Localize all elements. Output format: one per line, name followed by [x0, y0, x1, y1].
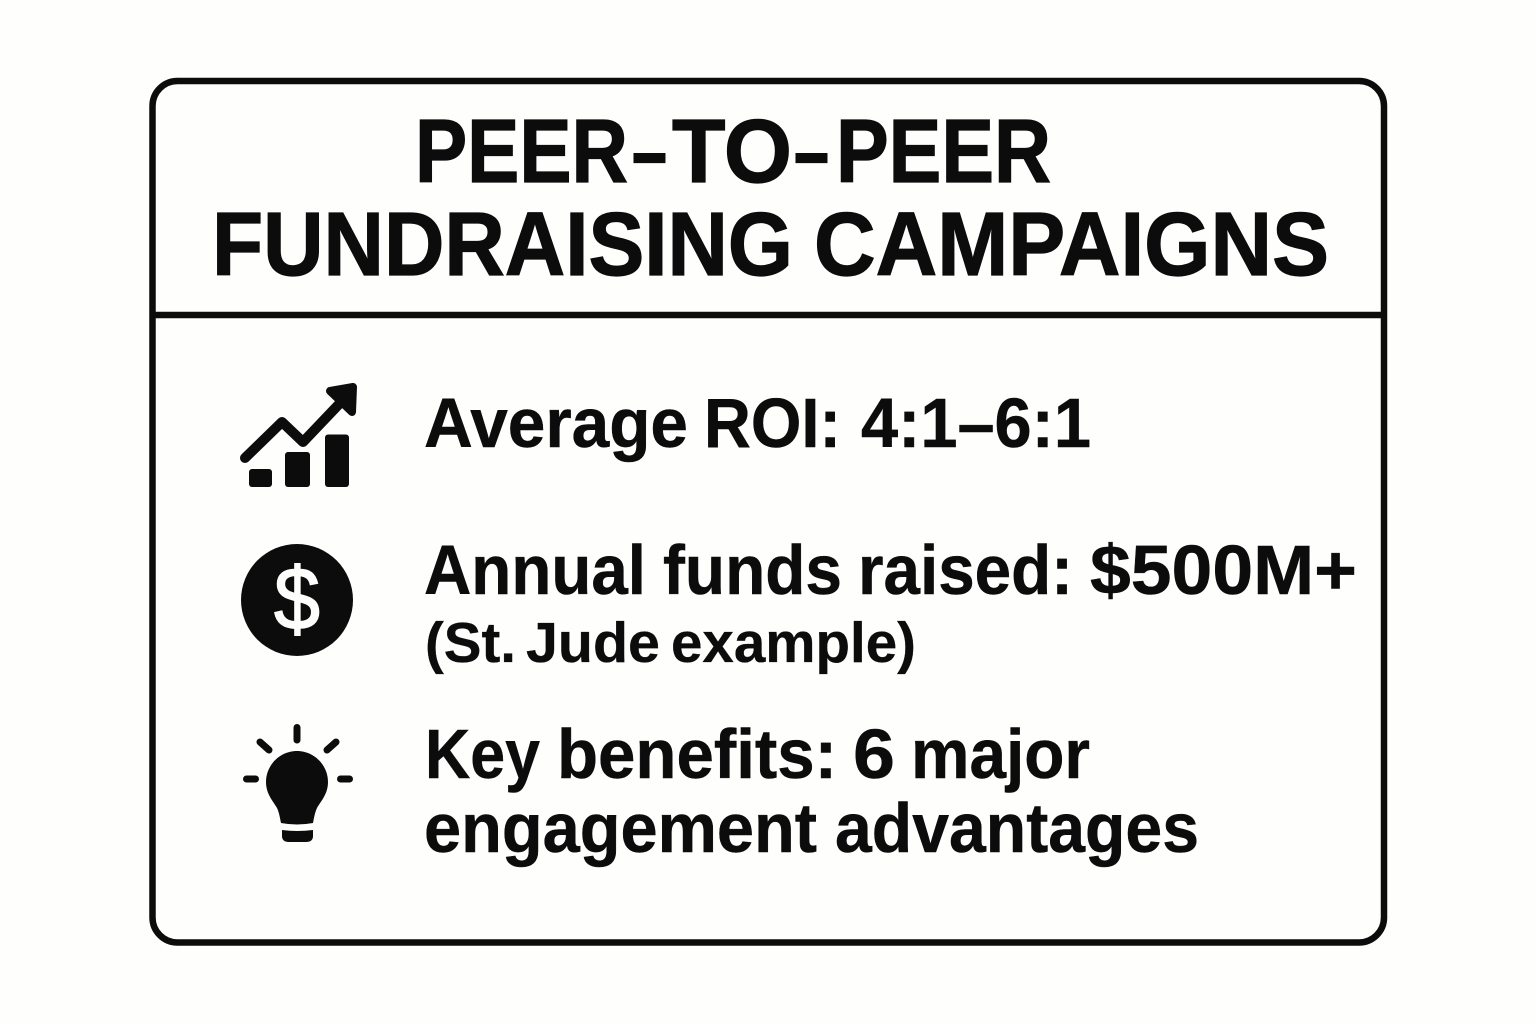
icon: dollar coin: $: [274, 549, 320, 648]
text: annual funds raised: $500M+: [1090, 531, 1357, 609]
title: –: [794, 102, 829, 202]
text: average ROI: ROI:: [704, 384, 841, 462]
text: key benefits: 6: [853, 715, 895, 793]
text: key benefits: engagement: [424, 789, 817, 867]
text: St. Jude example: (St.: [425, 611, 516, 675]
text: St. Jude example: [425, 611, 916, 675]
text: key benefits: benefits:: [557, 715, 837, 793]
title: TO: [672, 102, 792, 202]
text: key benefits: major: [911, 715, 1090, 793]
title: PEER: [836, 102, 1051, 202]
panel: outer frame: [152, 81, 1384, 942]
text: annual funds raised: Annual: [424, 531, 646, 609]
text: average ROI: [424, 384, 1091, 462]
text: key benefits: [424, 715, 1199, 867]
title: [212, 102, 1329, 295]
title: PEER: [415, 102, 628, 202]
text: average ROI: 4:1–6:1: [861, 384, 1091, 462]
icon: dollar coin: [241, 544, 353, 656]
icon: rising chart with arrow: [245, 387, 353, 487]
text: annual funds raised: [424, 531, 1357, 609]
title: FUNDRAISING: [212, 195, 793, 295]
text: average ROI: Average: [424, 384, 688, 462]
text: key benefits: advantages: [835, 789, 1199, 867]
title: –: [632, 102, 667, 202]
text: annual funds raised: raised:: [858, 531, 1073, 609]
icon: light bulb: [246, 728, 350, 842]
text: annual funds raised: funds: [663, 531, 842, 609]
text: St. Jude example: Jude: [526, 611, 660, 675]
text: key benefits: Key: [425, 715, 540, 793]
title: CAMPAIGNS: [814, 195, 1329, 295]
text: St. Jude example: example): [671, 611, 916, 675]
